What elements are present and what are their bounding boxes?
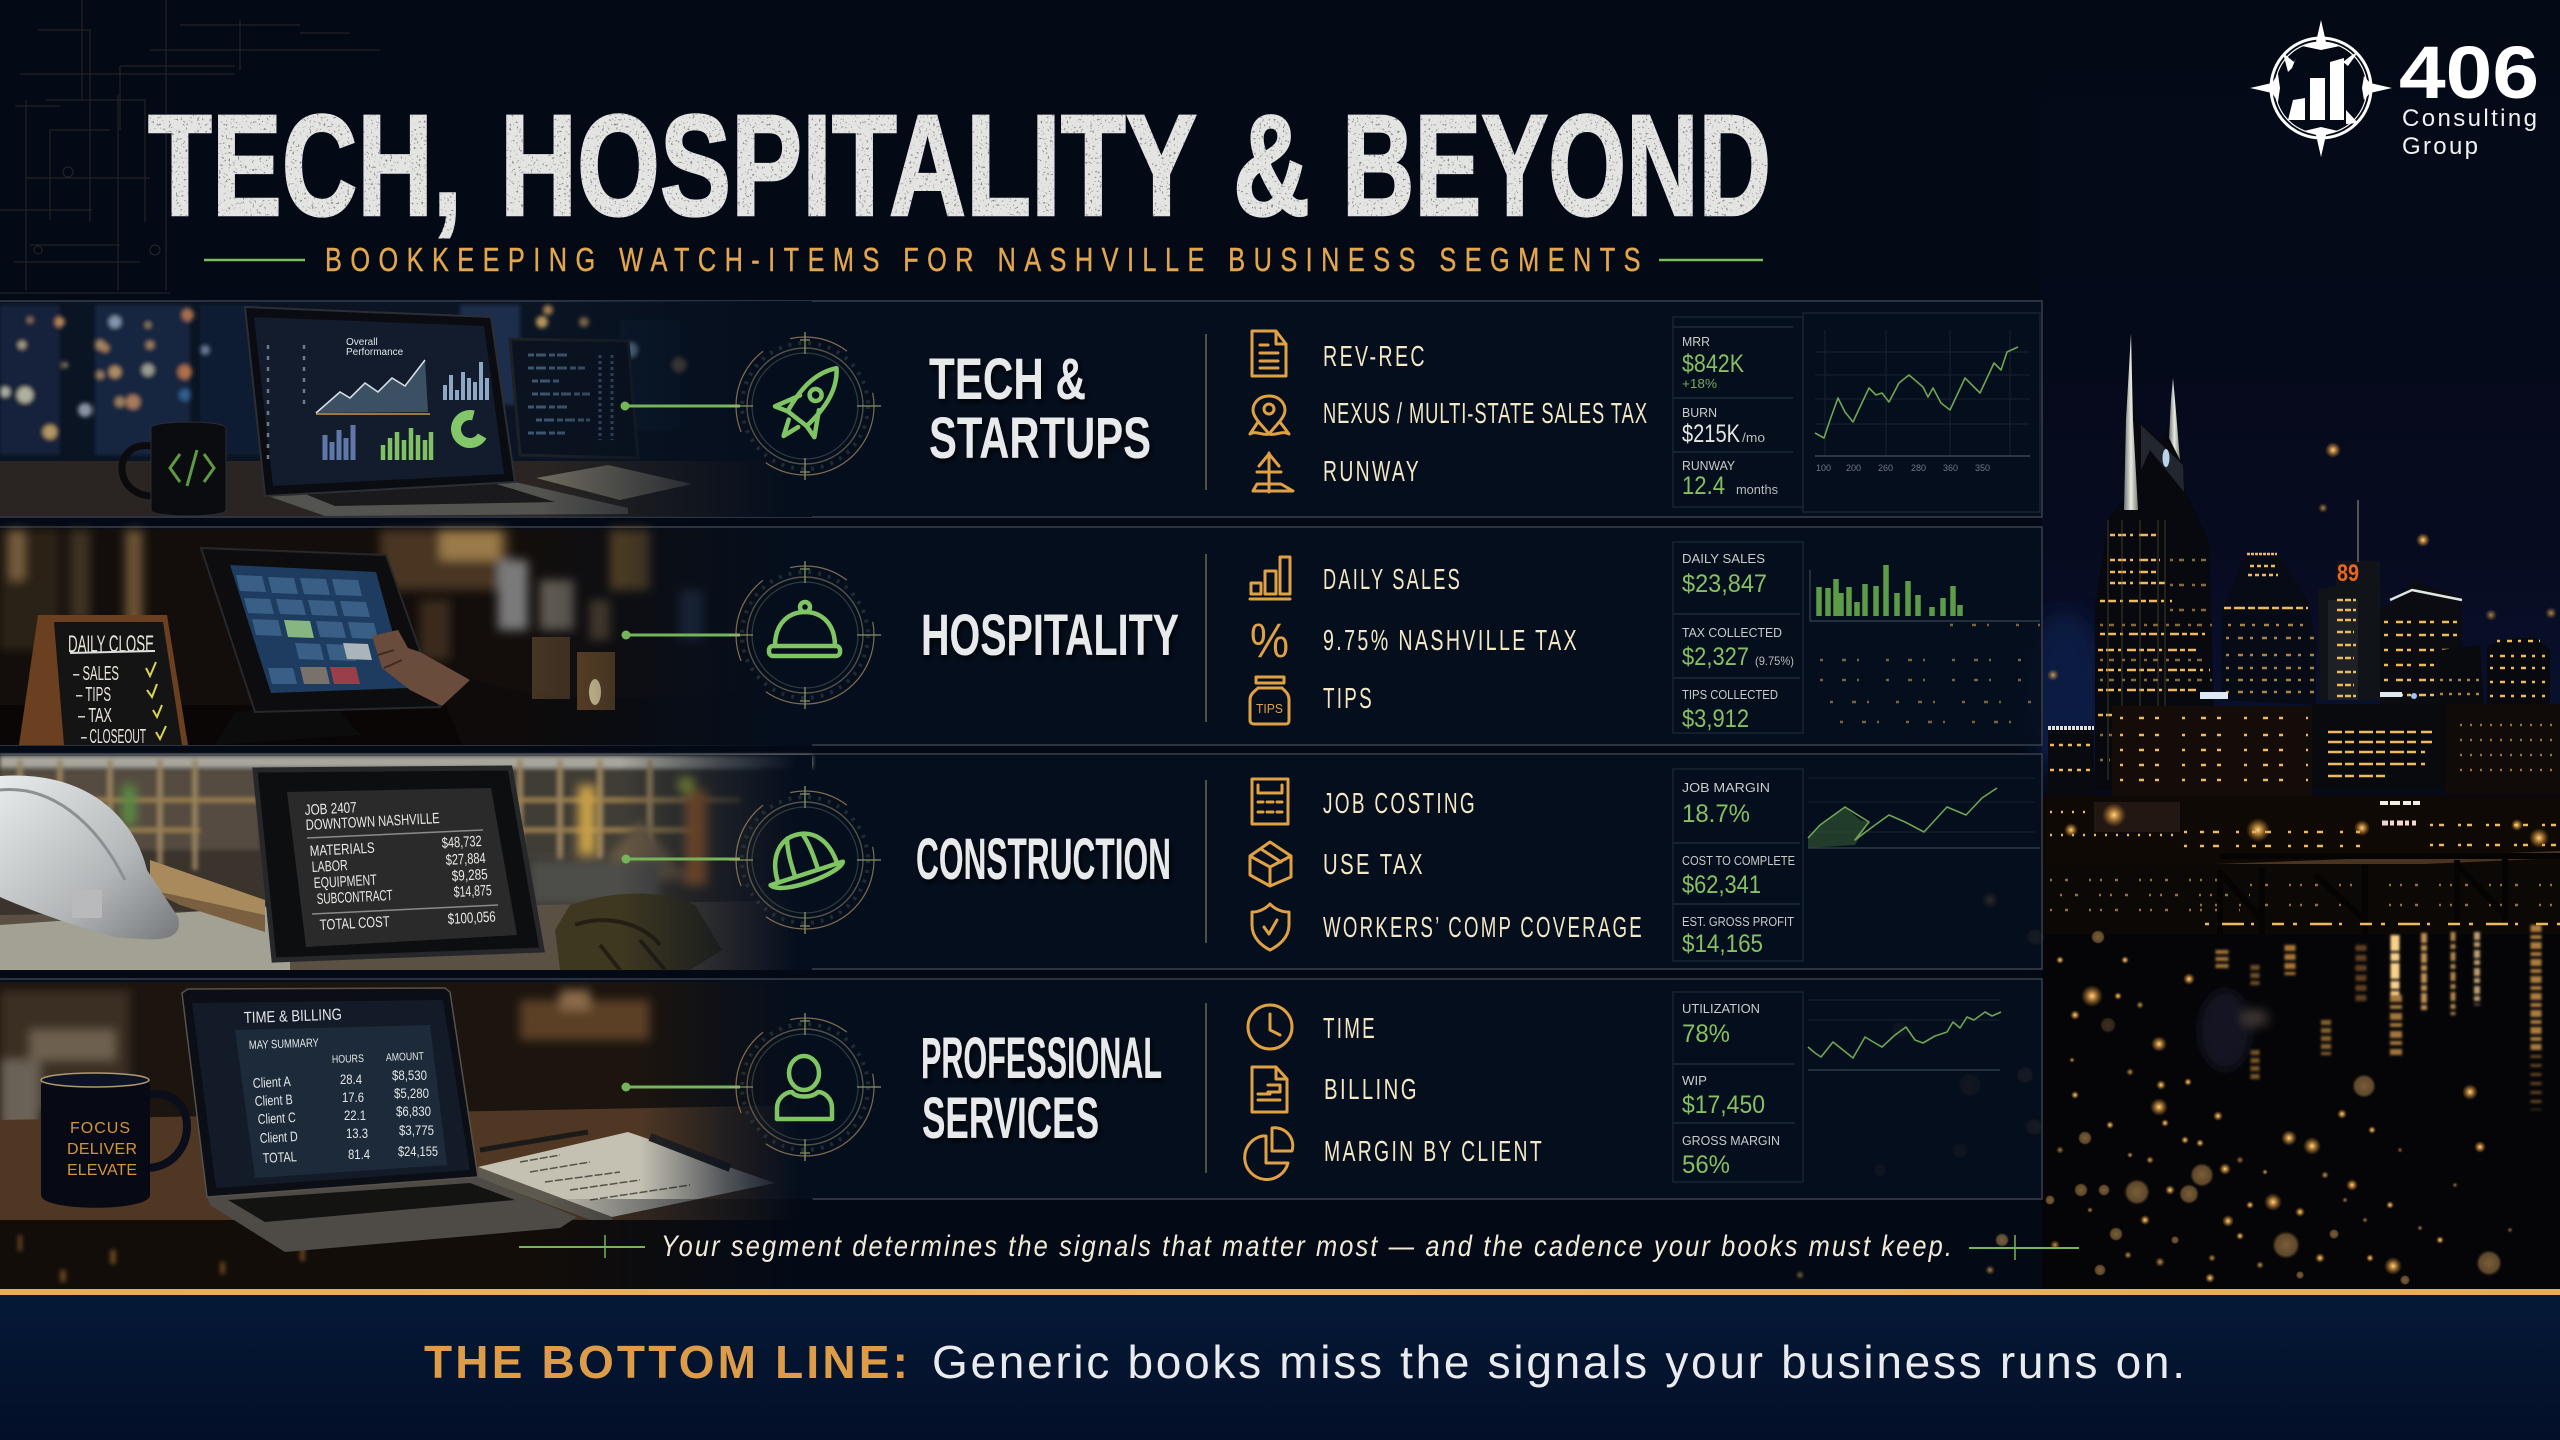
- line chart: tech and startups: 200: [1846, 463, 1861, 473]
- segment heading: hospitality: HOSPITALITY: [921, 603, 1179, 668]
- metrics card: tech and startups: /mo: [1742, 430, 1765, 445]
- metrics card: hospitality: (9.75%): [1755, 654, 1794, 668]
- sign tower: 89: [2337, 560, 2359, 587]
- icon: bar chart: [1250, 557, 1290, 599]
- metrics card: construction: [1673, 769, 1803, 961]
- low downtown blocks: [2048, 692, 2560, 796]
- icon: document: [1252, 331, 1286, 376]
- segment heading: tech and startups: [929, 347, 1151, 471]
- metrics card: hospitality: $3,912: [1682, 705, 1749, 733]
- logo: 406 Consulting Group: 406: [2399, 31, 2539, 114]
- icon: time and billing laptop: Client B: [254, 1091, 293, 1109]
- photo: professional services laptop on desk: [0, 982, 812, 1228]
- icon: hand and arm: [372, 630, 770, 745]
- metrics card: professional services: WIP: [1682, 1073, 1707, 1088]
- metrics card: professional services: 56%: [1682, 1151, 1730, 1179]
- title: TECH,: [148, 85, 462, 246]
- metrics card: professional services: GROSS MARGIN: [1682, 1133, 1780, 1148]
- icon: time and billing laptop: Client D: [259, 1128, 298, 1146]
- metrics card: tech and startups: [1673, 317, 1803, 507]
- icon: job cost tablet: $100,056: [447, 909, 496, 928]
- bar chart: daily sales: [1810, 565, 2040, 621]
- photo: hospitality POS terminal: [0, 528, 812, 748]
- icon: job cost tablet: TOTAL COST: [319, 913, 390, 934]
- metrics card: tech and startups: 12.4: [1682, 472, 1725, 500]
- segment heading: tech and startups: STARTUPS: [929, 406, 1151, 471]
- metrics card: tech and startups: +18%: [1682, 376, 1717, 391]
- icon: job cost tablet: $14,875: [453, 882, 492, 901]
- vertical dividers: [1205, 334, 1207, 1173]
- segment heading: professional services: SERVICES: [922, 1086, 1099, 1151]
- label: rev-rec: REV-REC: [1323, 341, 1427, 373]
- line chart: tech and startups: 280: [1911, 463, 1926, 473]
- photo: Nashville night skyline: [1795, 0, 2560, 1300]
- icon: job cost tablet: [255, 768, 542, 960]
- label: daily sales: DAILY SALES: [1323, 564, 1462, 596]
- line chart: tech and startups: 260: [1878, 463, 1893, 473]
- fade over services photo: [640, 981, 812, 1199]
- icon: second monitor with code: [510, 339, 638, 458]
- metrics card: tech and startups: RUNWAY: [1682, 458, 1735, 473]
- icon: tips jar: [1250, 677, 1289, 724]
- icon: job cost tablet: EQUIPMENT: [313, 872, 377, 892]
- icon: job cost tablet: JOB 2407: [304, 799, 357, 819]
- icon: job cost tablet: MATERIALS: [309, 840, 375, 860]
- panel: professional services background: [0, 979, 2042, 1199]
- icon: time and billing laptop: TIME & BILLING: [244, 1007, 342, 1027]
- medallion: construction helmet: [622, 786, 881, 934]
- metrics card: professional services: $17,450: [1682, 1091, 1765, 1119]
- icon: notepad and pen: [478, 1132, 775, 1228]
- icon: shield: [1252, 904, 1289, 950]
- area chart: job margin: [1808, 778, 2040, 848]
- label: nashville tax: 9.75% NASHVILLE TAX: [1323, 625, 1579, 657]
- icon: daily close chalkboard: – SALES: [73, 663, 119, 685]
- bottom band: bottom line: [0, 1289, 2560, 1440]
- logo: 406 Consulting Group: [2250, 20, 2539, 160]
- icon: time and billing laptop: HOURS: [332, 1053, 364, 1066]
- far bank lights: [2042, 864, 2560, 934]
- icon: time and billing laptop: $24,155: [398, 1143, 438, 1159]
- icon: calculator: [1252, 779, 1288, 824]
- icon: daily close chalkboard: – CLOSEOUT: [81, 726, 146, 748]
- label: nexus: NEXUS / MULTI-STATE SALES TAX: [1323, 398, 1648, 430]
- photo: construction site with job costing tablet: [0, 755, 812, 970]
- line chart: tech and startups: 360: [1943, 463, 1958, 473]
- icon: daily close chalkboard: – TAX: [78, 705, 112, 727]
- metrics card: tech and startups: months: [1736, 482, 1778, 497]
- icon: time and billing laptop: Client C: [257, 1109, 296, 1127]
- connectors and icon medallions: [620, 332, 881, 1161]
- metrics card: tech and startups: $842K: [1682, 350, 1744, 378]
- icon: tips jar: TIPS: [1256, 701, 1283, 716]
- line chart: utilization: [1808, 1000, 2001, 1070]
- label: tips: TIPS: [1323, 683, 1374, 715]
- icon: time and billing laptop: [182, 988, 577, 1252]
- metrics card: professional services: UTILIZATION: [1682, 1001, 1760, 1016]
- icon: code mug: [122, 422, 226, 516]
- icon: focus mug: [41, 1073, 187, 1208]
- icon: laptop with dashboard: [245, 307, 628, 516]
- icon: time and billing laptop: 13.3: [346, 1125, 368, 1141]
- metrics card: professional services: 78%: [1682, 1020, 1730, 1048]
- icon: pie chart: [1245, 1128, 1293, 1179]
- title: HOSPITALITY: [500, 85, 1197, 246]
- segment heading: professional services: PROFESSIONAL: [921, 1026, 1162, 1091]
- icon: wood plank: [150, 860, 265, 915]
- dome tower: [2221, 553, 2316, 705]
- subtitle: BOOKKEEPING WATCH-ITEMS FOR NASHVILLE BUSINESS SEGMENTS: [325, 241, 1649, 278]
- icon: focus mug: FOCUS: [70, 1120, 130, 1137]
- panel: tech and startups background: [0, 301, 2042, 517]
- label: time: TIME: [1323, 1013, 1377, 1045]
- metrics card: construction: $62,341: [1682, 871, 1761, 899]
- icon: time and billing laptop: TOTAL: [262, 1148, 297, 1166]
- line chart: tech and startups: 100: [1816, 463, 1831, 473]
- photo: tech laptop on desk: [0, 301, 812, 517]
- icon: time and billing laptop: Client A: [252, 1073, 292, 1091]
- icon: job cost tablet: $27,884: [445, 850, 486, 869]
- segment heading: construction: CONSTRUCTION: [916, 827, 1171, 892]
- label: workers comp: WORKERS’ COMP COVERAGE: [1323, 912, 1644, 944]
- icon: daily close chalkboard: DAILY CLOSE: [68, 631, 154, 658]
- icon: time and billing laptop: 28.4: [340, 1071, 362, 1087]
- metrics card: professional services: [1673, 992, 1803, 1182]
- sign tower: [2318, 500, 2382, 700]
- icon: notebook on desk: [536, 465, 692, 500]
- metrics card: hospitality: TAX COLLECTED: [1682, 625, 1782, 640]
- label: job costing: JOB COSTING: [1323, 788, 1477, 820]
- blueprint sketch lines: [0, 0, 380, 293]
- medallion: services person: [622, 1013, 881, 1161]
- title: &: [1233, 85, 1310, 246]
- right towers: [2380, 580, 2550, 710]
- icon: invoice document: [1252, 1067, 1287, 1112]
- icon: candle glasses: [532, 637, 615, 710]
- watch list: hospitality: [1250, 557, 1579, 724]
- label: margin by client: MARGIN BY CLIENT: [1324, 1136, 1544, 1168]
- bottom band: bottom line: Generic books miss the signals your business runs on.: [932, 1336, 2185, 1388]
- icon: clock: [1248, 1005, 1292, 1049]
- bridge truss: [2220, 856, 2560, 940]
- icon: time and billing laptop: $8,530: [392, 1067, 427, 1083]
- icon: focus mug: DELIVER: [67, 1141, 137, 1158]
- metrics card: tech and startups: $215K: [1682, 420, 1740, 448]
- reflected table strip: [0, 1199, 813, 1289]
- icon: time and billing laptop: 17.6: [342, 1089, 364, 1105]
- metrics card: hospitality: $23,847: [1682, 570, 1767, 598]
- icon: job cost tablet: SUBCONTRACT: [316, 887, 393, 908]
- icon: time and billing laptop: $6,830: [396, 1103, 431, 1119]
- icon: time and billing laptop: 81.4: [348, 1146, 370, 1162]
- icon: runway: [1253, 453, 1293, 492]
- medallion: tech rocket: [620, 332, 881, 480]
- metrics card: tech and startups: MRR: [1682, 334, 1710, 349]
- icon: POS terminal: [201, 548, 440, 745]
- icon: time and billing laptop: $5,280: [394, 1085, 429, 1101]
- metrics card: tech and startups: BURN: [1682, 405, 1717, 420]
- icon: daily close chalkboard: – TIPS: [76, 684, 111, 706]
- watch list: professional services: [1245, 1005, 1544, 1179]
- icon: daily close chalkboard: [19, 615, 188, 748]
- takeaway line: Your segment determines the signals that matter most — and the cadence your books must keep.: [661, 1230, 1954, 1263]
- city lights through hospitality panel: [1820, 625, 2040, 722]
- label: use tax: USE TAX: [1323, 849, 1425, 881]
- watch list: tech and startups: [1250, 331, 1648, 492]
- metrics card: construction: COST TO COMPLETE: [1682, 853, 1795, 868]
- line chart: tech and startups: [1803, 313, 2040, 512]
- logo: 406 Consulting Group: Group: [2402, 133, 2478, 160]
- title: BEYOND: [1342, 85, 1771, 246]
- icon: map pin: [1250, 396, 1289, 434]
- logo: 406 Consulting Group: Consulting: [2402, 105, 2537, 132]
- icon: time and billing laptop: AMOUNT: [386, 1051, 424, 1064]
- metrics card: hospitality: DAILY SALES: [1682, 551, 1765, 566]
- medallion: hospitality bell: [622, 561, 881, 709]
- icon: time and billing laptop: MAY SUMMARY: [249, 1036, 319, 1052]
- metrics card: construction: $14,165: [1682, 930, 1763, 958]
- icon: focus mug: ELEVATE: [67, 1162, 137, 1179]
- icon: percent: %: [1250, 615, 1289, 668]
- icon: time and billing laptop: 22.1: [344, 1107, 366, 1123]
- watch list: construction: [1250, 779, 1644, 950]
- metrics card: construction: 18.7%: [1682, 800, 1750, 828]
- metrics card: construction: JOB MARGIN: [1682, 780, 1770, 795]
- icon: laptop with dashboard: Overall: [346, 337, 378, 348]
- metrics card: construction: EST. GROSS PROFIT: [1682, 914, 1794, 929]
- label: runway: RUNWAY: [1323, 456, 1421, 488]
- panel: hospitality background: [0, 527, 2042, 745]
- icon: compass logo: [2250, 20, 2392, 157]
- water reflections: [2222, 925, 2536, 1110]
- icon: white hard hat: [0, 776, 179, 939]
- bottom band: bottom line: THE BOTTOM LINE:: [424, 1336, 908, 1388]
- icon: job cost tablet: LABOR: [311, 857, 348, 876]
- icon: time and billing laptop: $3,775: [399, 1122, 434, 1138]
- riverfront row: [2042, 796, 2560, 878]
- metrics card: hospitality: [1673, 542, 1803, 733]
- icon: box: [1250, 842, 1291, 886]
- icon: job cost tablet: $9,285: [451, 866, 488, 885]
- segment heading: tech and startups: TECH &: [929, 347, 1086, 412]
- panel: construction background: [0, 754, 2042, 969]
- icon: laptop with dashboard: Performance: [346, 347, 404, 358]
- icon: work gloves: [555, 893, 722, 970]
- segment heading: professional services: [921, 1026, 1162, 1151]
- line chart: tech and startups: 350: [1975, 463, 1990, 473]
- metrics card: hospitality: TIPS COLLECTED: [1682, 687, 1778, 702]
- label: billing: BILLING: [1324, 1074, 1419, 1106]
- icon: job cost tablet: DOWNTOWN NASHVILLE: [305, 810, 440, 834]
- metrics card: hospitality: $2,327: [1682, 643, 1749, 671]
- icon: job cost tablet: $48,732: [441, 833, 482, 852]
- title: [148, 85, 1771, 246]
- AT&T tower: [2095, 333, 2214, 790]
- bokeh lights: [1795, 442, 2557, 1285]
